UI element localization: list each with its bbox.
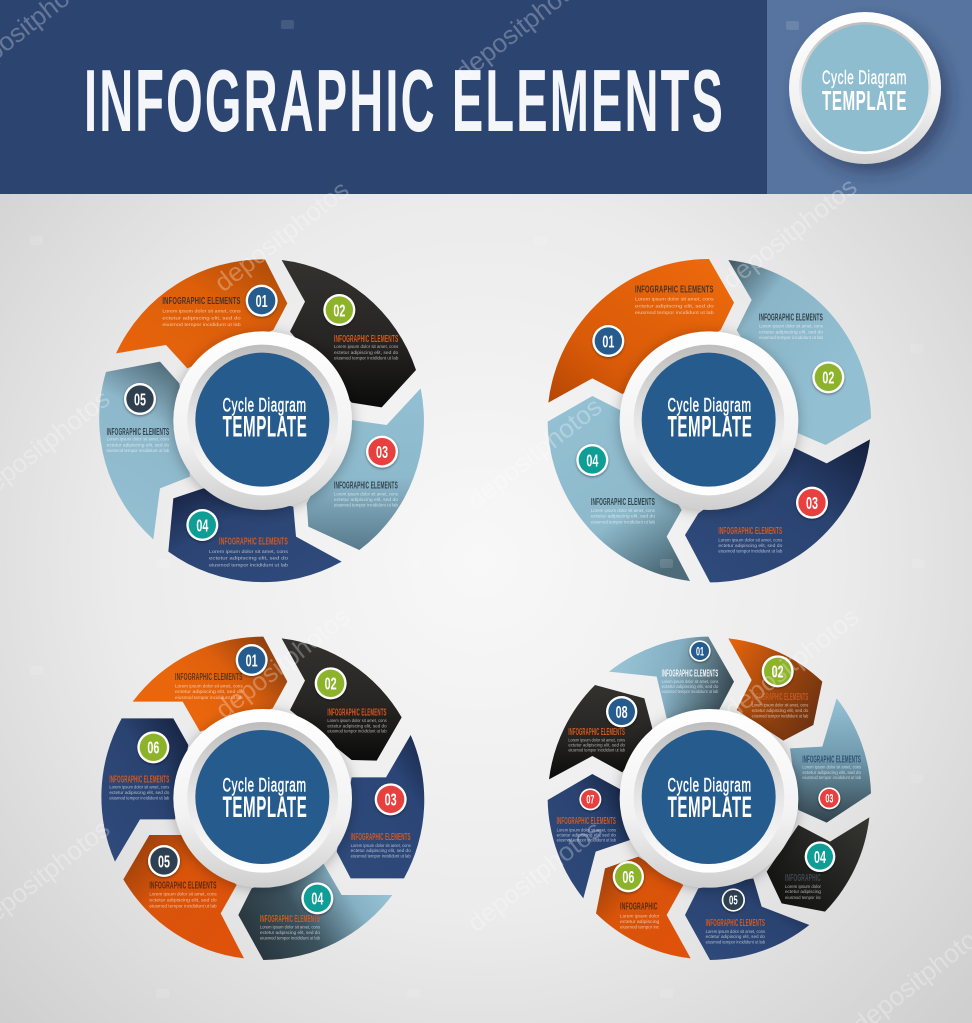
label 03: Lorem ipsum dolor sit amet, cons	[718, 537, 783, 543]
label 04: Lorem ipsum dolor sit amet, cons	[209, 549, 289, 555]
label 08: eiusmod tempor incididunt ut lab	[568, 747, 625, 753]
label 01: eiusmod tempor incididunt ut lab	[162, 322, 241, 328]
badge 01: 01	[256, 291, 268, 311]
badge 04: 04	[311, 889, 323, 909]
label 04: ectetur adipiscing	[785, 889, 821, 895]
badge 01	[236, 644, 268, 676]
badge 03	[796, 487, 828, 519]
badge 03: 03	[825, 792, 834, 806]
label 06: INFOGRAPHIC	[620, 901, 658, 912]
label 03: Lorem ipsum dolor sit amet, cons	[351, 843, 411, 849]
label 02: Lorem ipsum dolor sit amet, cons	[752, 703, 809, 709]
badge 03: 03	[376, 442, 388, 462]
label 07	[557, 816, 616, 843]
centre hub	[173, 331, 352, 510]
label 04	[260, 914, 320, 942]
badge 04: 04	[196, 515, 208, 535]
badge 03: 03	[385, 790, 397, 810]
segment 05	[685, 878, 809, 960]
badge 01	[246, 285, 278, 317]
label 01: INFOGRAPHIC ELEMENTS	[162, 296, 241, 307]
label 05	[107, 427, 170, 454]
segment 08	[549, 685, 652, 779]
label 01	[662, 669, 719, 695]
label 08: Lorem ipsum dolor sit amet, cons	[568, 737, 625, 743]
label 04: eiusmod tempor incididunt ut lab	[260, 936, 320, 942]
label 03: Lorem ipsum dolor sit amet, cons	[802, 765, 861, 771]
label 05: eiusmod tempor incididunt ut lab	[149, 903, 217, 909]
label 01	[162, 296, 241, 328]
label 03	[802, 754, 861, 781]
label 03	[718, 526, 783, 555]
segment 01	[548, 259, 734, 403]
header badge	[789, 12, 941, 164]
badge 04	[186, 509, 218, 541]
badge 02	[762, 655, 794, 687]
panel: six step cycle	[101, 637, 424, 960]
label 03: eiusmod tempor incididunt ut lab	[802, 775, 861, 781]
label 08	[568, 727, 625, 753]
centre hub: Cycle Diagram	[668, 776, 752, 797]
label 06: ectetur adipiscing	[620, 919, 660, 925]
segment 05	[123, 835, 244, 958]
label 02	[759, 313, 823, 341]
panel: four step cycle: INFOGRAPHIC ELEMENTS	[718, 526, 782, 537]
centre hub: Cycle Diagram	[668, 396, 752, 417]
centre hub	[620, 709, 798, 888]
badge 08: 08	[616, 702, 628, 722]
badge 05: 05	[158, 851, 170, 871]
label 06: Lorem ipsum dolor sit amet, cons	[109, 785, 170, 791]
label 01: eiusmod tempor incididunt ut lab	[175, 695, 243, 701]
label 01	[175, 672, 243, 701]
label 06: ectetur adipiscing elit, sed do	[109, 790, 170, 796]
segment 02	[728, 260, 871, 445]
badge 01	[689, 640, 711, 662]
label 04: INFOGRAPHIC ELEMENTS	[219, 537, 288, 548]
label 03	[351, 832, 411, 859]
label 04: eiusmod tempor incididunt ut lab	[591, 519, 655, 525]
segment 01	[133, 637, 287, 732]
label 04: ectetur adipiscing elit, sed do	[260, 930, 320, 936]
badge 01	[592, 325, 624, 357]
panel: eight step cycle: INFOGRAPHIC ELEMENTS	[662, 669, 718, 680]
label 05: eiusmod tempor incididunt ut lab	[107, 448, 170, 454]
segment 04	[168, 488, 342, 582]
badge 02: 02	[325, 674, 337, 694]
label 02: eiusmod tempor incididunt ut lab	[334, 356, 399, 362]
panel: six step cycle: INFOGRAPHIC ELEMENTS	[260, 914, 320, 925]
label 06	[620, 901, 660, 931]
label 01: Lorem ipsum dolor sit amet, cons	[162, 309, 241, 315]
badge 04: 04	[814, 847, 826, 867]
badge 06: 06	[147, 738, 159, 758]
label 03: ectetur adipiscing elit, sed do	[334, 497, 398, 503]
watermarks: depositphotos	[461, 814, 607, 938]
segment 06	[101, 718, 188, 862]
label 03: eiusmod tempor incididunt ut lab	[334, 503, 398, 509]
label 05: ectetur adipiscing elit, sed do	[107, 442, 170, 448]
badge 02	[315, 667, 347, 699]
segment 01	[116, 259, 287, 368]
badge 05	[722, 888, 745, 912]
centre hub: Cycle Diagram	[223, 396, 307, 417]
label 02: ectetur adipiscing elit, sed do	[327, 723, 387, 729]
panel: eight step cycle: INFOGRAPHIC ELEMENTS	[802, 754, 861, 765]
segment 05	[99, 362, 190, 539]
badge 08	[606, 696, 637, 727]
label 02: Lorem ipsum dolor sit amet, cons	[759, 324, 823, 330]
panel: eight step cycle: INFOGRAPHIC ELEMENTS	[557, 816, 616, 827]
label 06	[109, 774, 170, 802]
badge 05	[148, 845, 180, 877]
label 01: Lorem ipsum dolor sit amet, cons	[635, 297, 714, 303]
segment 07	[548, 774, 630, 898]
segment 02	[282, 638, 402, 761]
label 01	[635, 284, 714, 316]
segment 02	[728, 638, 822, 741]
panel: eight step cycle: INFOGRAPHIC	[785, 873, 821, 884]
panel: eight step cycle: INFOGRAPHIC ELEMENTS	[568, 727, 625, 738]
label 01: ectetur adipiscing elit, sed do	[635, 303, 714, 309]
label 05: eiusmod tempor incididunt ut lab	[706, 940, 765, 946]
label 01: ectetur adipiscing elit, sed do	[175, 689, 243, 695]
label 06: eiusmod tempor inc	[620, 925, 660, 931]
label 05: ectetur adipiscing elit, sed do	[706, 934, 765, 940]
label 01: ectetur adipiscing elit, sed do	[162, 315, 241, 321]
badge 07: 07	[586, 793, 595, 807]
label 02: Lorem ipsum dolor sit amet, cons	[327, 718, 387, 724]
label 05: ectetur adipiscing elit, sed do	[149, 897, 217, 903]
label 03: eiusmod tempor incididunt ut lab	[351, 853, 411, 859]
label 02: ectetur adipiscing elit, sed do	[759, 329, 823, 335]
label 07: eiusmod tempor incididunt ut lab	[557, 837, 616, 843]
label 04	[209, 537, 289, 568]
label 04: Lorem ipsum dolor sit amet, cons	[591, 508, 655, 514]
label 01: INFOGRAPHIC ELEMENTS	[635, 284, 714, 295]
segment 04	[548, 396, 690, 581]
panel: six step cycle: INFOGRAPHIC ELEMENTS	[327, 707, 387, 718]
badge 02: 02	[333, 300, 345, 320]
label 04: eiusmod tempor inc	[785, 895, 821, 901]
badge 01: 01	[602, 331, 614, 351]
badge 06	[613, 861, 644, 892]
panel: five step cycle: INFOGRAPHIC ELEMENTS	[107, 427, 169, 438]
label 04	[785, 873, 821, 901]
badge 03: 03	[806, 493, 818, 513]
label 04: ectetur adipiscing elit, sed do	[209, 556, 288, 562]
label 06: eiusmod tempor incididunt ut lab	[109, 796, 170, 802]
watermarks: depositphotos	[716, 171, 862, 295]
segment 02	[282, 260, 416, 407]
segment 03	[685, 439, 870, 582]
watermarks: depositphotos	[208, 174, 354, 298]
badge 04	[805, 841, 835, 872]
badge 03	[818, 787, 840, 809]
label 02: eiusmod tempor incididunt ut lab	[327, 728, 387, 734]
label 02	[334, 334, 399, 362]
label 03: Lorem ipsum dolor sit amet, cons	[334, 491, 398, 497]
centre hub: Cycle Diagram	[223, 776, 307, 797]
segment 03	[790, 698, 871, 823]
label 01: INFOGRAPHIC ELEMENTS	[175, 672, 243, 683]
label 03: eiusmod tempor incididunt ut lab	[718, 549, 783, 555]
panel: eight step cycle: INFOGRAPHIC ELEMENTS	[706, 918, 765, 929]
badge 04	[301, 882, 333, 914]
panel: eight step cycle: INFOGRAPHIC ELEMENTS	[752, 692, 808, 703]
badge 04	[576, 444, 608, 476]
segment 06	[596, 857, 691, 958]
centre hub: TEMPLATE	[223, 791, 307, 824]
label 02	[752, 692, 809, 719]
label 05	[706, 918, 765, 946]
panel: six step cycle: INFOGRAPHIC ELEMENTS	[109, 774, 169, 785]
label 03: ectetur adipiscing elit, sed do	[718, 543, 783, 549]
label 07: ectetur adipiscing elit, sed do	[557, 832, 616, 838]
header side panel	[767, 0, 972, 194]
badge 02: 02	[772, 662, 784, 682]
badge 02	[323, 294, 355, 326]
header band	[0, 0, 768, 194]
segment 04	[767, 817, 869, 912]
label 02: Lorem ipsum dolor sit amet, cons	[334, 344, 399, 350]
watermarks: depositphotos	[718, 601, 864, 725]
badge 01: 01	[246, 650, 258, 670]
badge 05	[124, 383, 156, 415]
label 02: ectetur adipiscing elit, sed do	[334, 350, 399, 356]
label 02: eiusmod tempor incididunt ut lab	[752, 713, 809, 719]
label 02: ectetur adipiscing elit, sed do	[752, 708, 809, 714]
label 03	[334, 481, 398, 509]
watermarks: depositphotos	[461, 391, 607, 515]
label 05: INFOGRAPHIC ELEMENTS	[149, 881, 217, 892]
label 02: eiusmod tempor incididunt ut lab	[759, 335, 823, 341]
label 04	[591, 497, 655, 525]
panel: five step cycle: INFOGRAPHIC ELEMENTS	[334, 334, 398, 345]
badge 05: 05	[729, 894, 738, 908]
badge 02	[812, 361, 844, 393]
label 05: Lorem ipsum dolor sit amet, cons	[107, 437, 170, 443]
panel: eight step cycle	[548, 637, 871, 960]
centre hub: TEMPLATE	[668, 791, 752, 824]
centre hub: TEMPLATE	[223, 411, 307, 444]
segment 03	[337, 735, 424, 878]
centre hub	[173, 709, 352, 888]
label 01: eiusmod tempor incididunt ut lab	[635, 310, 714, 316]
badge 07	[579, 788, 601, 810]
panel: five step cycle: INFOGRAPHIC ELEMENTS	[334, 481, 398, 492]
label 02	[327, 707, 387, 734]
panel: four step cycle: INFOGRAPHIC ELEMENTS	[591, 497, 655, 508]
badge 02: 02	[822, 368, 834, 388]
label 04: ectetur adipiscing elit, sed do	[591, 514, 655, 520]
label 04: eiusmod tempor incididunt ut lab	[209, 562, 288, 568]
panel: six step cycle: INFOGRAPHIC ELEMENTS	[351, 832, 411, 843]
panel: four step cycle: INFOGRAPHIC ELEMENTS	[759, 313, 823, 324]
centre hub: TEMPLATE	[668, 411, 752, 444]
label 05: Lorem ipsum dolor sit amet, cons	[706, 929, 765, 935]
segment 03	[307, 388, 424, 550]
badge 03	[375, 783, 407, 815]
label 05	[149, 881, 217, 909]
badge 06	[137, 731, 169, 763]
segment 01	[609, 637, 734, 718]
panel: four step cycle	[548, 259, 871, 582]
label 08: ectetur adipiscing elit, sed do	[568, 742, 625, 748]
label 04: Lorem ipsum dolor sit amet, cons	[260, 925, 320, 931]
watermarks: depositphotos	[209, 601, 355, 725]
header badge: Cycle Diagram	[822, 68, 907, 89]
label 03: ectetur adipiscing elit, sed do	[802, 770, 861, 776]
label 01: Lorem ipsum dolor sit amet, cons	[662, 679, 719, 685]
badge 05: 05	[134, 389, 146, 409]
centre hub	[620, 331, 798, 510]
label 01: ectetur adipiscing elit, sed do	[662, 684, 719, 690]
label 06: Lorem ipsum dolor	[620, 913, 660, 919]
badge 03	[366, 436, 398, 468]
label 05: Lorem ipsum dolor sit amet, cons	[149, 892, 217, 898]
label 03: ectetur adipiscing elit, sed do	[351, 848, 411, 854]
label 01: Lorem ipsum dolor sit amet, cons	[175, 683, 243, 689]
panel: five step cycle	[99, 259, 424, 582]
badge 04: 04	[586, 450, 598, 470]
segment 04	[238, 863, 392, 960]
label 07: Lorem ipsum dolor sit amet, cons	[557, 827, 616, 833]
label 04: Lorem ipsum dolor	[785, 884, 821, 890]
badge 01: 01	[696, 644, 704, 658]
label 01: eiusmod tempor incididunt ut lab	[662, 689, 719, 695]
badge 06: 06	[622, 867, 634, 887]
